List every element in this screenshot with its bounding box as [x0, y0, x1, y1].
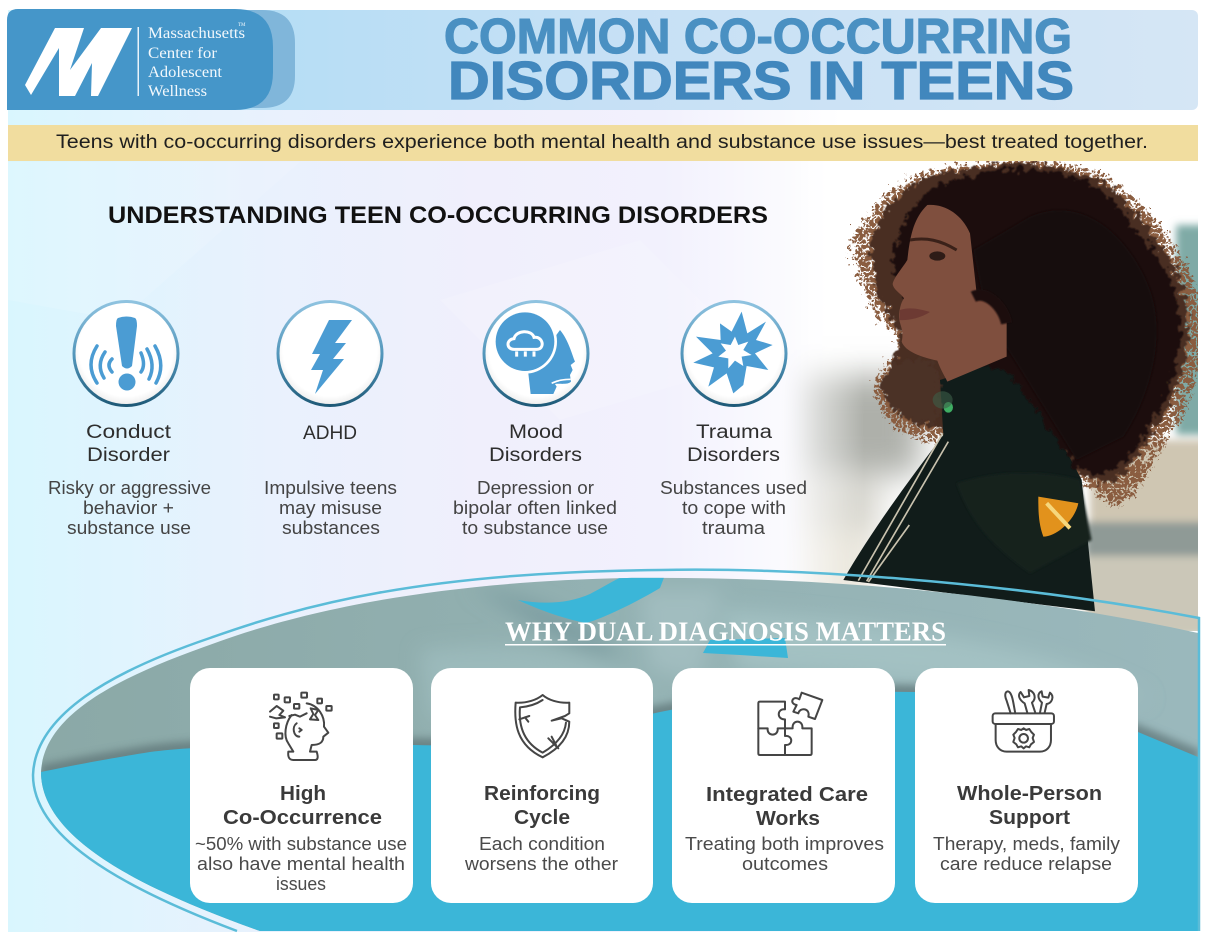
subtitle banner: Teens with co-occurring disorders experience both mental health and substance use issues—best treated together.: [56, 132, 1148, 153]
card: reinforcing cycle: [431, 668, 653, 903]
card: whole-person support: care reduce relapse: [940, 854, 1112, 874]
panel outline: [33, 570, 1199, 931]
column: adhd: substances: [282, 518, 380, 538]
card: whole-person support: Support: [989, 807, 1070, 829]
card: integrated care works: Works: [756, 808, 820, 830]
icon: head with cloud: [484, 302, 588, 406]
photo: woman in profile: [780, 156, 1205, 636]
column: conduct disorder: [48, 302, 211, 538]
column: adhd: ADHD: [303, 423, 357, 444]
icon: lightning bolt: [278, 302, 382, 406]
logo block: [7, 9, 295, 110]
column: trauma disorders: Trauma: [696, 422, 772, 443]
column: mood disorders: Disorders: [489, 445, 582, 466]
column: adhd: may misuse: [279, 498, 382, 518]
logo text: Wellness: [148, 83, 207, 100]
logo text: Adolescent: [148, 64, 223, 81]
icon: starburst: [682, 302, 786, 406]
logo text: [148, 23, 246, 100]
card: integrated care works: outcomes: [742, 854, 828, 874]
card: high co-occurrence: also have mental health: [197, 854, 405, 874]
blue ground and hands photo: [0, 570, 1205, 934]
column: adhd: [264, 302, 397, 538]
header band: [8, 10, 1198, 111]
title: [444, 10, 1074, 111]
column: trauma disorders: trauma: [702, 518, 766, 538]
hair halo: [845, 156, 1198, 500]
icon: toolbox: [993, 690, 1054, 752]
column: conduct disorder: Disorder: [87, 445, 171, 466]
card: high co-occurrence: issues: [276, 874, 326, 894]
card: integrated care works: Treating both improves: [685, 834, 884, 854]
column: adhd: Impulsive teens: [264, 478, 397, 498]
lens flares: [1038, 497, 1078, 537]
card: integrated care works: [672, 668, 895, 903]
column: mood disorders: bipolar often linked: [453, 498, 617, 518]
logo text: Center for: [148, 45, 218, 62]
card: integrated care works: Integrated Care: [706, 784, 868, 806]
icon: head with puzzle pieces: [270, 693, 332, 760]
column: conduct disorder: behavior +: [83, 498, 174, 518]
main heading: UNDERSTANDING TEEN CO-OCCURRING DISORDERS: [108, 202, 768, 229]
front curls: [880, 359, 940, 424]
column: trauma disorders: Disorders: [687, 445, 780, 466]
hair core: [893, 170, 1180, 473]
card: high co-occurrence: ~50% with substance use: [195, 834, 407, 854]
column: conduct disorder: Risky or aggressive: [48, 478, 211, 498]
jacket piping: [858, 433, 948, 582]
icon: alert: [74, 302, 178, 406]
subtitle banner: [8, 125, 1198, 161]
card: reinforcing cycle: worsens the other: [464, 854, 618, 874]
card: whole-person support: Therapy, meds, family: [933, 834, 1120, 854]
column: mood disorders: to substance use: [462, 518, 608, 538]
column: mood disorders: [453, 302, 617, 538]
title: DISORDERS IN TEENS: [448, 51, 1074, 111]
column: mood disorders: Mood: [509, 422, 563, 443]
column: conduct disorder: Conduct: [86, 422, 172, 443]
card: reinforcing cycle: Cycle: [514, 807, 570, 829]
logo text: TM: [238, 23, 246, 28]
card: reinforcing cycle: Each condition: [479, 834, 605, 854]
card: high co-occurrence: Co-Occurrence: [223, 807, 382, 829]
column: trauma disorders: to cope with: [682, 498, 786, 518]
card: high co-occurrence: High: [280, 783, 326, 805]
logo text: Massachusetts: [148, 25, 245, 42]
card: reinforcing cycle: Reinforcing: [484, 783, 600, 805]
column: trauma disorders: [660, 302, 807, 538]
card: whole-person support: [915, 668, 1138, 903]
column: mood disorders: Depression or: [477, 478, 594, 498]
face: [893, 205, 1007, 382]
column: conduct disorder: substance use: [67, 518, 191, 538]
icon: puzzle: [758, 693, 822, 755]
card: high co-occurrence: [190, 668, 413, 903]
title: COMMON CO-OCCURRING: [444, 10, 1072, 64]
logo mark: [25, 28, 132, 96]
column: trauma disorders: Substances used: [660, 478, 807, 498]
section heading: WHY DUAL DIAGNOSIS MATTERS: [505, 616, 946, 646]
jacket: [843, 357, 1095, 611]
lower panel: [0, 570, 1205, 934]
icon: cracked shield: [515, 695, 569, 757]
card: whole-person support: Whole-Person: [957, 783, 1102, 805]
